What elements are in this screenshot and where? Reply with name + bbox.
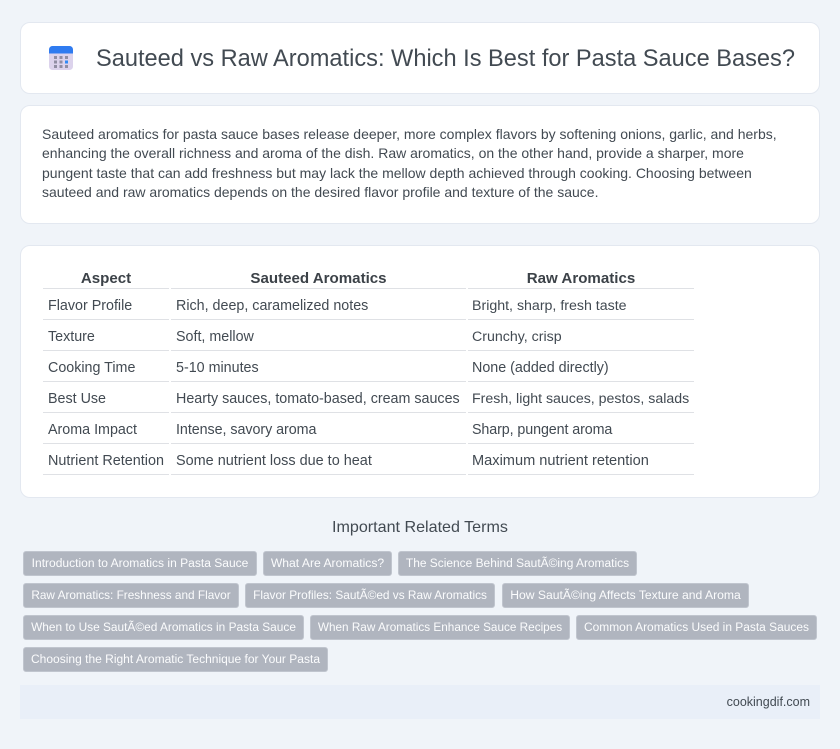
related term tags: The Science Behind SautÃ©ing Aromatics (406, 556, 629, 570)
comparison table: Texture (48, 329, 95, 345)
intro panel (20, 105, 820, 224)
comparison table: 5-10 minutes (176, 360, 259, 376)
comparison table: Bright, sharp, fresh taste (472, 298, 627, 314)
header card (20, 22, 820, 94)
comparison table: Aspect (81, 270, 131, 287)
comparison table: Hearty sauces, tomato-based, cream sauces (176, 391, 460, 407)
comparison table: Best Use (48, 391, 106, 407)
comparison table: Crunchy, crisp (472, 329, 562, 345)
related term tags: When Raw Aromatics Enhance Sauce Recipes (318, 621, 562, 634)
related term tags: Raw Aromatics: Freshness and Flavor (31, 588, 231, 602)
intro paragraph: enhancing the overall richness and aroma of the dish. Raw aromatics, on the other hand, provide a sharper, more (42, 145, 744, 161)
footer site name: cookingdif.com (727, 695, 810, 709)
comparison table: Cooking Time (48, 360, 135, 376)
comparison table: Raw Aromatics (527, 270, 635, 287)
related term tags: Choosing the Right Aromatic Technique for Your Pasta (31, 652, 320, 666)
intro paragraph: pungent taste that can add freshness but may lack the mellow depth achieved through cooking. Choosing between (42, 165, 752, 181)
related term tags: How SautÃ©ing Affects Texture and Aroma (510, 588, 741, 602)
comparison table: Rich, deep, caramelized notes (176, 298, 368, 314)
comparison table: Intense, savory aroma (176, 422, 316, 438)
comparison table: Nutrient Retention (48, 453, 164, 469)
comparison table: Sauteed Aromatics (250, 270, 387, 287)
comparison panel (20, 245, 820, 498)
related term tags: What Are Aromatics? (271, 556, 384, 570)
related term tags: Common Aromatics Used in Pasta Sauces (584, 620, 809, 634)
footer (20, 685, 820, 719)
comparison table: Aroma Impact (48, 422, 137, 438)
title: Sauteed vs Raw Aromatics: Which Is Best for Pasta Sauce Bases? (96, 46, 795, 72)
intro paragraph: Sauteed aromatics for pasta sauce bases release deeper, more complex flavors by softening onions, garlic, and herbs, (42, 126, 777, 142)
related term tags: Introduction to Aromatics in Pasta Sauce (32, 556, 248, 570)
comparison table: Maximum nutrient retention (472, 453, 649, 469)
intro paragraph: sauteed and raw aromatics depends on the desired flavor profile and texture of the sauce. (42, 184, 598, 200)
comparison table: Some nutrient loss due to heat (176, 453, 372, 469)
related term tags: When to Use SautÃ©ed Aromatics in Pasta Sauce (31, 620, 296, 634)
comparison table: Fresh, light sauces, pestos, salads (472, 391, 689, 407)
comparison table: Sharp, pungent aroma (472, 422, 612, 438)
comparison table: None (added directly) (472, 360, 609, 376)
comparison table: Flavor Profile (48, 298, 132, 314)
comparison table: Soft, mellow (176, 329, 254, 345)
related term tags (23, 551, 817, 672)
related terms heading: Important Related Terms (332, 518, 508, 536)
intro paragraph (42, 126, 777, 200)
icon: calendar (49, 46, 73, 70)
related term tags: Flavor Profiles: SautÃ©ed vs Raw Aromatics (253, 588, 487, 602)
